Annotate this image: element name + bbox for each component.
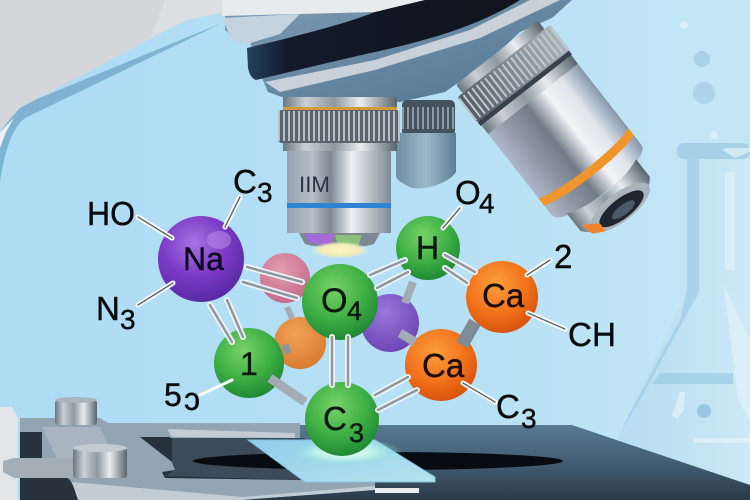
label: N3: 3 xyxy=(120,304,136,335)
atom: orange back xyxy=(274,317,326,369)
atom: H: H xyxy=(416,230,439,266)
label: C3 right: 3 xyxy=(521,403,537,434)
label: CH: CH xyxy=(568,316,616,353)
atom: Ca lower: Ca xyxy=(422,347,465,384)
atom: Ca upper xyxy=(466,261,538,333)
label: 2: 2 xyxy=(554,238,572,275)
double bonds xyxy=(210,255,475,410)
nosepiece housing xyxy=(222,0,572,102)
atom: Ca lower xyxy=(405,329,477,401)
left base and stage clamp xyxy=(0,407,400,500)
atom: H xyxy=(396,216,460,280)
atom: O4: 4 xyxy=(347,296,362,326)
atom: purple back xyxy=(361,294,419,352)
label: O4 right: O xyxy=(455,174,481,211)
atom: Na xyxy=(158,216,244,302)
atom: C3: 3 xyxy=(349,418,364,448)
bubbles xyxy=(680,21,718,139)
single bonds xyxy=(270,282,475,402)
label: 5: 5 xyxy=(164,377,182,413)
central objective xyxy=(278,97,400,258)
label connectors xyxy=(138,197,565,402)
atom: 1: 1 xyxy=(240,346,258,382)
stage knobs xyxy=(55,397,127,478)
atom: C3 xyxy=(305,382,379,456)
flask in background xyxy=(617,143,750,490)
label: O4 right: 4 xyxy=(479,188,495,219)
label: C3 right: C xyxy=(496,388,520,425)
labels xyxy=(87,163,616,434)
objective marking: IIM xyxy=(299,172,330,197)
atom: Ca upper: Ca xyxy=(482,277,525,314)
atom: Na: Na xyxy=(183,241,224,277)
glass slide xyxy=(248,438,435,493)
atom: C3: C xyxy=(323,400,347,437)
right objective xyxy=(450,16,674,256)
microscope arm xyxy=(0,0,225,182)
label: C3 top: 3 xyxy=(257,177,273,208)
stage top xyxy=(165,425,750,500)
label: N3: N xyxy=(96,290,120,327)
atom: pink xyxy=(260,253,310,303)
atom: O4: O xyxy=(321,282,347,320)
label: 5: ɔ xyxy=(184,381,200,417)
label: C3 top: C xyxy=(233,163,257,200)
label: HO: HO xyxy=(87,195,135,232)
atom: 1 xyxy=(214,328,284,398)
atom: O4 xyxy=(302,264,378,340)
back objective xyxy=(396,100,456,188)
